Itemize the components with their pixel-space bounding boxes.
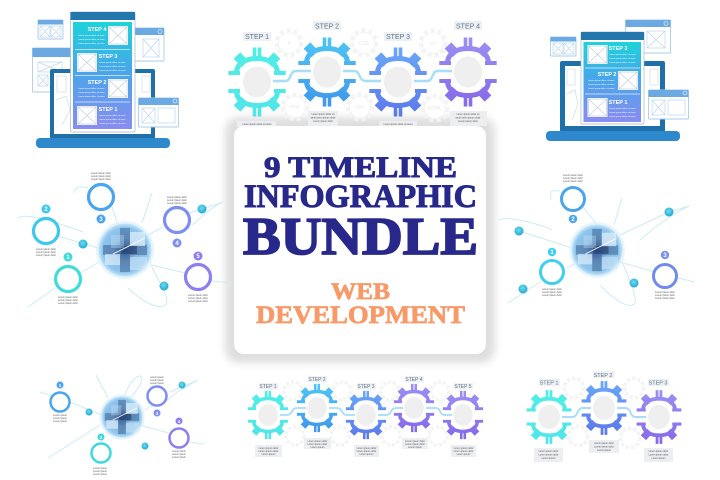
background gears: //: [288, 41, 291, 47]
text blocks: Lorem ipsum dolor: [563, 180, 583, 183]
step labels: [243, 21, 482, 41]
gear step 1: [248, 391, 288, 439]
card panel: [234, 126, 486, 354]
text blocks: Lorem ipsum dolor: [188, 297, 208, 300]
phone: Lorem ipsum dolor sit amet: [609, 53, 636, 56]
text blocks: Lorem ipsum dolor: [655, 297, 675, 300]
text blocks: Lorem ipsum: [150, 376, 164, 379]
globe diagram: three steps: [499, 174, 695, 305]
step labels: STEP 1: [540, 380, 558, 386]
timeline: five step gears: [248, 376, 483, 457]
phone: STEP 1: [99, 107, 117, 113]
laptop base: [546, 131, 680, 141]
step labels: STEP 3: [386, 34, 410, 41]
step labels: STEP 1: [259, 384, 277, 390]
phone: STEP 3: [609, 46, 627, 52]
phone: Lorem ipsum dolor sit amet: [99, 69, 126, 72]
step captions: Lorem ipsum dolor: [405, 440, 425, 443]
phone: [581, 32, 644, 124]
laptop screen: [560, 61, 665, 132]
numbered dots: 3: [99, 217, 103, 223]
numbered dots: 1: [66, 255, 70, 261]
text blocks: Lorem ipsum dolor: [563, 174, 583, 177]
globe diagram: four steps: [40, 375, 204, 476]
phone: Lorem ipsum dolor sit amet: [588, 83, 615, 86]
step captions: Lorem ipsum dolor: [313, 120, 333, 123]
text blocks: Lorem ipsum: [172, 453, 186, 456]
wireframe window left: [550, 37, 576, 56]
wireframe window left: [32, 48, 70, 92]
step captions: Lorem ipsum dolor sit: [457, 113, 480, 116]
step labels: STEP 2: [308, 377, 326, 383]
background gears: {P}: [356, 105, 364, 111]
text blocks: Lorem ipsum: [172, 450, 186, 453]
step captions: Lorem ipsum: [360, 453, 373, 456]
step labels: [259, 376, 473, 390]
phone: Lorem ipsum dolor sit amet: [99, 114, 126, 117]
text blocks: Lorem ipsum: [93, 467, 107, 470]
text blocks: Lorem ipsum dolor: [542, 288, 562, 291]
step captions: Lorem ipsum dolor sit amet: [243, 123, 272, 126]
card shadow: [225, 117, 495, 363]
phone: Lorem ipsum dolor sit amet: [78, 95, 105, 98]
phone: Lorem ipsum dolor sit amet: [609, 115, 636, 118]
text blocks: Lorem ipsum dolor: [655, 291, 675, 294]
step captions: Lorem ipsum dolor sit amet: [384, 123, 413, 126]
phone: Lorem ipsum dolor sit amet: [78, 91, 105, 94]
step captions: Lorem ipsum: [262, 453, 275, 456]
gear step 1: [228, 48, 286, 116]
text blocks: Lorem ipsum: [93, 473, 107, 476]
step captions: Lorem ipsum dolor: [594, 446, 614, 448]
step labels: STEP 3: [357, 384, 375, 390]
step captions: Lorem ipsum dolor: [405, 443, 425, 446]
wireframe window top right: [134, 28, 164, 61]
step captions: Lorem ipsum: [652, 457, 665, 460]
blue beads: [78, 204, 206, 290]
phone: Lorem ipsum dolor sit amet: [99, 61, 126, 64]
background gears: CSS: [359, 41, 370, 47]
timeline: three step gears: [527, 371, 681, 462]
text blocks: Lorem ipsum dolor: [58, 296, 78, 299]
phone: Lorem ipsum dolor sit amet: [609, 61, 636, 64]
wireframe window top left: [38, 20, 63, 39]
phone: STEP 4: [88, 27, 107, 33]
background gears: </>: [429, 41, 437, 47]
background gears: HTML: [428, 106, 442, 112]
background gears: [564, 378, 644, 448]
text blocks: Lorem ipsum dolor: [655, 294, 675, 297]
step labels: [539, 371, 669, 386]
gear step 4: [439, 38, 497, 106]
phone: [70, 12, 135, 132]
step captions: Lorem ipsum: [597, 449, 611, 452]
gear step 2: [297, 384, 337, 432]
gear step 3: [637, 390, 681, 444]
step captions: Lorem ipsum: [311, 446, 324, 449]
text blocks: Lorem ipsum dolor: [167, 196, 187, 199]
laptop base: [36, 138, 170, 148]
text blocks: Lorem ipsum dolor: [36, 254, 56, 257]
text blocks: Lorem ipsum dolor: [58, 302, 78, 305]
heading: bundle: BUNDLE: [243, 208, 478, 266]
gear step 2: [298, 38, 356, 106]
step labels: STEP 2: [594, 373, 612, 379]
text blocks: Lorem ipsum dolor: [91, 178, 111, 181]
phone: Lorem ipsum dolor sit amet: [99, 118, 126, 121]
text blocks: Lorem ipsum: [172, 456, 186, 459]
numbered dots: [42, 204, 202, 262]
text blocks: Lorem ipsum dolor: [91, 175, 111, 178]
heading: 9 timeline: 9 TIMELINE: [264, 151, 457, 184]
numbered dots: 5: [196, 254, 200, 260]
text blocks: Lorem ipsum dolor: [91, 172, 111, 175]
step captions: [237, 111, 487, 127]
step captions: Lorem ipsum: [457, 453, 470, 456]
text blocks: [542, 174, 675, 300]
text blocks: Lorem ipsum dolor: [542, 294, 562, 297]
step captions: Lorem ipsum dolor: [458, 120, 478, 123]
step captions: amet lorem ipsum dolor: [456, 116, 481, 120]
numbered dots: [548, 215, 669, 259]
subheading: web: WEB: [331, 279, 390, 305]
connectors: [562, 408, 646, 417]
numbered dots: 3: [663, 253, 667, 259]
text blocks: Lorem ipsum dolor: [188, 294, 208, 297]
phone: STEP 3: [99, 54, 117, 60]
rings: [50, 386, 188, 462]
step labels: STEP 3: [649, 380, 667, 386]
step labels: STEP 2: [315, 24, 339, 30]
step captions: Lorem ipsum dolor: [454, 447, 474, 450]
phone: STEP 1: [609, 100, 627, 106]
phone: Lorem ipsum dolor sit amet: [99, 122, 126, 125]
wireframe window top: [626, 20, 670, 53]
numbered dots: 2: [571, 217, 575, 223]
step captions: Lorem ipsum dolor: [539, 454, 559, 456]
step captions: [534, 440, 673, 462]
gear step 3: [346, 391, 386, 439]
phone: STEP 2: [598, 72, 616, 78]
laptop screen: [50, 69, 155, 139]
text blocks: Lorem ipsum dolor: [58, 299, 78, 302]
text blocks: Lorem ipsum dolor: [36, 251, 56, 254]
numbered dots: 1: [59, 383, 62, 388]
step labels: STEP 4: [405, 377, 423, 383]
orbit lines: [18, 187, 232, 307]
text blocks: Lorem ipsum: [93, 470, 107, 473]
text blocks: Lorem ipsum: [53, 420, 67, 423]
phone: Lorem ipsum dolor sit amet: [78, 38, 105, 41]
text blocks: Lorem ipsum dolor: [563, 177, 583, 180]
text blocks: Lorem ipsum dolor: [188, 300, 208, 303]
phone: STEP 2: [88, 80, 106, 86]
wireframe window bottom right: [648, 90, 688, 119]
heading: infographic: INFOGRAPHIC: [244, 179, 477, 215]
step captions: Lorem ipsum: [408, 446, 422, 449]
step labels: STEP 5: [454, 384, 472, 390]
globe: [99, 394, 145, 440]
phone: Lorem ipsum dolor sit amet: [78, 34, 105, 37]
numbered dots: 1: [550, 250, 554, 256]
globe: [96, 221, 154, 279]
illustration: laptop and phone with four steps: [32, 12, 178, 148]
phone: Lorem ipsum dolor sit amet: [588, 87, 615, 90]
numbered dots: 3: [156, 411, 159, 416]
gear step 3: [369, 48, 427, 116]
text blocks: Lorem ipsum dolor: [167, 199, 187, 202]
numbered dots: 4: [178, 419, 181, 424]
step captions: Lorem ipsum: [542, 457, 555, 460]
blue beads: [514, 208, 674, 294]
blue beads: [86, 382, 186, 450]
step captions: Lorem ipsum dolor: [308, 440, 328, 443]
step captions: amet lorem ipsum dolor: [311, 116, 336, 120]
background gears: PHP: [290, 105, 301, 111]
timeline: four step gears: [228, 21, 497, 127]
step captions: Lorem ipsum dolor: [308, 443, 328, 446]
rings: [540, 188, 676, 288]
text blocks: Lorem ipsum: [53, 414, 67, 417]
text blocks: Lorem ipsum dolor: [36, 248, 56, 251]
numbered dots: 2: [44, 207, 48, 213]
phone: Lorem ipsum dolor sit amet: [609, 107, 636, 110]
numbered dots: 2: [100, 435, 103, 440]
phone: Lorem ipsum dolor sit amet: [78, 87, 105, 90]
step captions: Lorem ipsum dolor: [454, 450, 474, 453]
step captions: Lorem ipsum dolor: [357, 447, 377, 450]
numbered dots: 4: [175, 241, 179, 247]
text blocks: Lorem ipsum: [150, 379, 164, 382]
gear step 1: [527, 390, 571, 444]
step labels: STEP 4: [456, 24, 480, 30]
gear step 5: [443, 391, 483, 439]
phone: Lorem ipsum dolor sit amet: [78, 42, 105, 45]
step captions: Lorem ipsum dolor: [539, 450, 559, 453]
gear step 4: [394, 384, 434, 432]
background gears: [284, 382, 449, 445]
numbered dots: [56, 382, 182, 440]
text blocks: Lorem ipsum: [53, 417, 67, 420]
connectors: [280, 408, 452, 415]
text blocks: Lorem ipsum: [150, 382, 164, 385]
step captions: Lorem ipsum dolor: [259, 450, 279, 453]
step captions: Lorem ipsum dolor: [357, 450, 377, 453]
step captions: Lorem ipsum dolor sit: [312, 113, 335, 116]
phone: Lorem ipsum dolor sit amet: [588, 79, 615, 82]
background gears: [276, 30, 448, 120]
wireframe window bottom right: [138, 98, 178, 127]
text blocks: Lorem ipsum dolor: [167, 202, 187, 205]
step captions: Lorem ipsum dolor: [649, 454, 669, 456]
connectors: [273, 71, 452, 81]
illustration: laptop and phone with three steps: [546, 20, 688, 141]
phone: Lorem ipsum dolor sit amet: [609, 57, 636, 60]
orbit lines: [499, 191, 695, 305]
text blocks: Lorem ipsum dolor: [542, 291, 562, 294]
globe diagram: five steps: [18, 172, 232, 307]
orbit lines: [40, 375, 204, 458]
step captions: Lorem ipsum dolor: [259, 447, 279, 450]
globe: [569, 222, 625, 278]
text blocks: [53, 376, 186, 476]
step captions: Lorem ipsum dolor: [649, 450, 669, 453]
step captions: [255, 438, 476, 457]
phone: Lorem ipsum dolor sit amet: [609, 111, 636, 114]
title card: [234, 126, 486, 354]
subheading: development: DEVELOPMENT: [256, 302, 465, 329]
gear step 2: [582, 381, 626, 435]
rings: [34, 184, 210, 292]
step labels: STEP 1: [245, 34, 269, 41]
phone: Lorem ipsum dolor sit amet: [99, 65, 126, 68]
step captions: Lorem ipsum dolor: [594, 442, 614, 445]
text blocks: [36, 172, 208, 305]
